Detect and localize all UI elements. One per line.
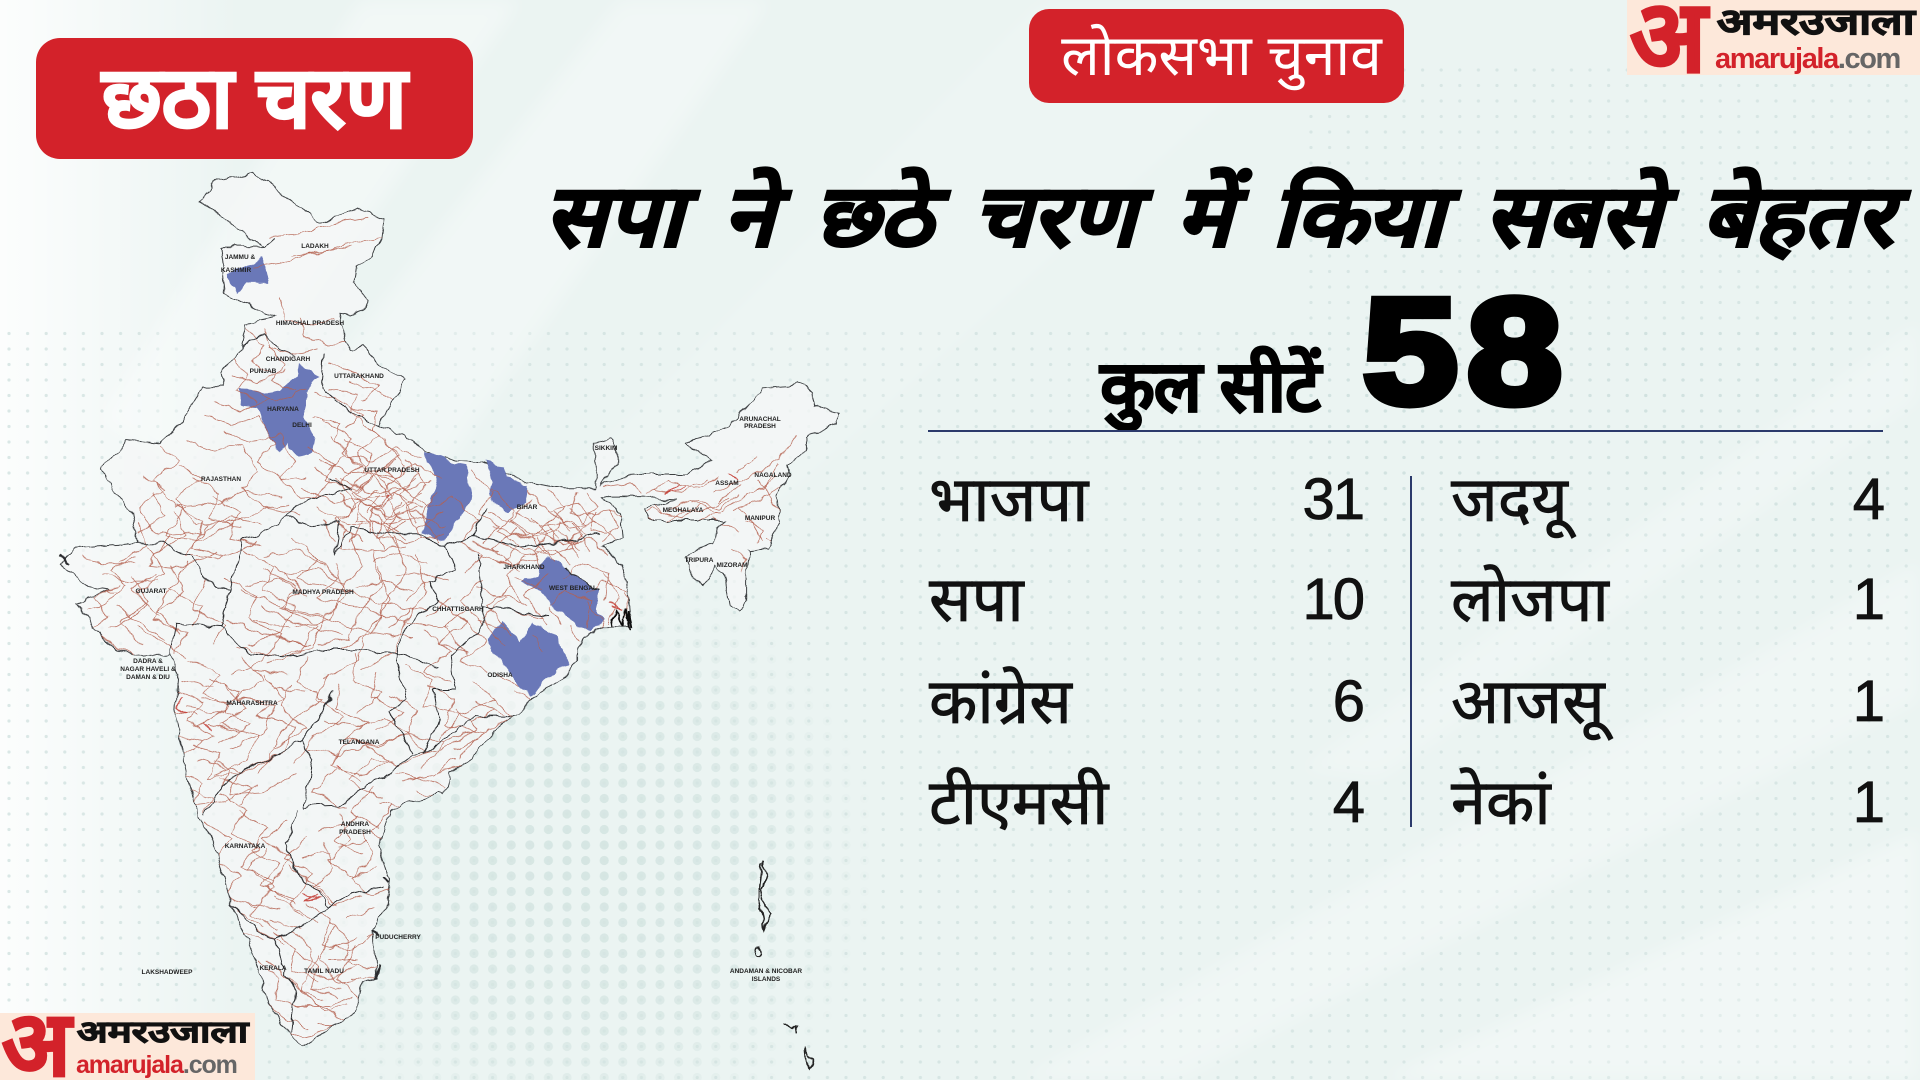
row: NC: 1 (1853, 770, 1883, 835)
row: Congress: 6 (1333, 669, 1363, 734)
logo: bottom left Amar Ujala (0, 1013, 255, 1080)
state name labels: PRADESH (339, 829, 371, 836)
state name labels: ODISHA (487, 672, 513, 679)
state name labels: ASSAM (715, 480, 739, 487)
logo: bottom left Amar Ujala: अमरउजाला (77, 1016, 248, 1049)
row: JDU (1450, 465, 1884, 539)
state name labels: UTTAR PRADESH (364, 467, 420, 474)
map outline (60, 173, 839, 1047)
highlighted regions in blue (228, 257, 603, 697)
state name labels: KERALA (259, 965, 287, 972)
state name labels: DELHI (292, 422, 312, 429)
state name labels: DAMAN & DIU (126, 674, 170, 681)
state name labels: MAHARASHTRA (226, 700, 278, 707)
state name labels: MADHYA PRADESH (292, 589, 354, 596)
logo: top right Amar Ujala: अमरउजाला (1717, 1, 1915, 42)
state name labels: LADAKH (301, 243, 329, 250)
row: NC (1450, 767, 1883, 838)
row: AJSU (1451, 667, 1883, 741)
state boundaries in dark lines (60, 240, 632, 1033)
row: LJP: लोजपा (1451, 565, 1609, 635)
state name labels: TELANGANA (339, 739, 380, 746)
row: TMC: टीएमसी (929, 768, 1108, 838)
state name labels: PRADESH (744, 423, 776, 430)
badge: Lok Sabha election: लोकसभा चुनाव (1061, 24, 1382, 88)
state name labels: SIKKIM (595, 445, 617, 452)
state name labels (120, 243, 802, 983)
state name labels: WEST BENGAL (549, 585, 597, 592)
state name labels: CHANDIGARH (266, 356, 311, 363)
logo: top right Amar Ujala: amarujala.com (1715, 43, 1900, 75)
Andaman and Nicobar islands (755, 862, 813, 1068)
logo: bottom left Amar Ujala: amarujala.com (76, 1051, 237, 1079)
state name labels: LAKSHADWEEP (142, 969, 193, 976)
vertical divider (1410, 476, 1412, 827)
map of India (58, 172, 840, 1070)
row: SP: सपा (929, 565, 1024, 635)
divider line under total (928, 430, 1883, 432)
state name labels: UTTARAKHAND (334, 373, 384, 380)
row: AJSU: आजसू (1451, 667, 1605, 737)
state name labels: JHARKHAND (503, 564, 545, 571)
badge: sixth phase (36, 38, 473, 159)
row: JDU: 4 (1853, 467, 1883, 532)
state name labels: NAGAR HAVELI & (120, 666, 176, 673)
state name labels: JAMMU & (225, 254, 255, 261)
title: सपा ने छठे चरण में किया सबसे बेहतर (544, 169, 1893, 264)
state name labels: MANIPUR (745, 515, 775, 522)
state name labels: MIZORAM (716, 562, 748, 569)
state name labels: GUJARAT (136, 588, 166, 595)
badge: sixth phase: छठा चरण (102, 50, 407, 146)
row: JDU: जदयू (1451, 465, 1568, 535)
row: BJP: भाजपा (929, 465, 1088, 535)
total seats label: कुल सीटें (1100, 348, 1320, 427)
row: Congress (928, 666, 1363, 737)
map drawing with wobbly boundaries (60, 173, 839, 1068)
constituency boundaries in red (66, 218, 816, 1035)
state name labels: ANDHRA (341, 821, 369, 828)
row: SP: 10 (1302, 567, 1363, 632)
state name labels: PUDUCHERRY (375, 934, 421, 941)
state name labels: CHHATTISGARH (432, 606, 484, 613)
state name labels: KARNATAKA (225, 843, 266, 850)
state name labels: ARUNACHAL (739, 416, 781, 423)
state name labels: TAMIL NADU (304, 968, 344, 975)
state name labels: RAJASTHAN (201, 476, 241, 483)
row: BJP (929, 465, 1363, 535)
row: LJP (1450, 564, 1883, 635)
table: right column of parties (1450, 465, 1884, 838)
row: TMC: 4 (1333, 770, 1363, 835)
state name labels: PUNJAB (250, 368, 277, 375)
state name labels: ANDAMAN & NICOBAR (730, 968, 802, 975)
table: left column of parties (928, 465, 1364, 838)
state name labels: NAGALAND (754, 472, 792, 479)
logo: top right Amar Ujala (1627, 0, 1920, 75)
row: AJSU: 1 (1853, 669, 1883, 734)
row: Congress: कांग्रेस (929, 667, 1072, 737)
row: SP (928, 565, 1364, 635)
state name labels: HARYANA (267, 406, 299, 413)
total seats number: 58 (1363, 267, 1571, 435)
badge: Lok Sabha election (1029, 9, 1404, 103)
row: TMC (928, 767, 1364, 838)
state name labels: BIHAR (517, 504, 538, 511)
state name labels: MEGHALAYA (663, 507, 704, 514)
state name labels: HIMACHAL PRADESH (276, 320, 344, 327)
state name labels: ISLANDS (752, 976, 781, 983)
state name labels: KASHMIR (221, 267, 251, 274)
state name labels: TRIPURA (685, 557, 714, 564)
row: LJP: 1 (1853, 567, 1883, 632)
row: BJP: 31 (1302, 467, 1363, 532)
row: NC: नेकां (1451, 768, 1551, 838)
state name labels: DADRA & (133, 658, 163, 665)
